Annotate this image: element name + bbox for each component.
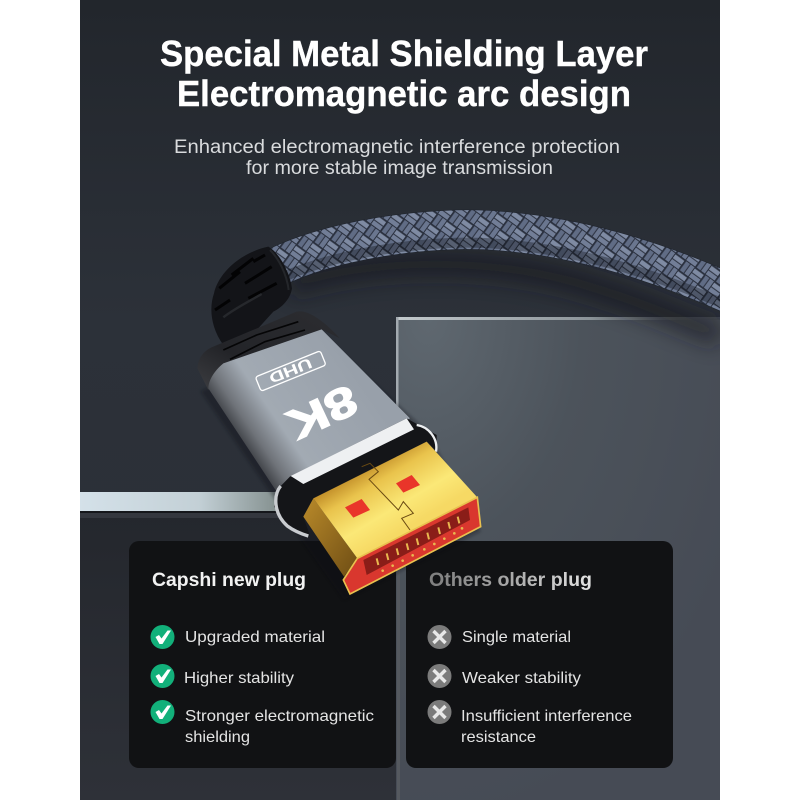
circuit traces <box>362 463 413 530</box>
title: Electromagnetic arc design <box>177 73 631 114</box>
heading: Capshi new plug: Capshi new plug <box>152 570 306 591</box>
item: insufficient resistance <box>428 700 632 746</box>
cable shadow <box>290 264 720 335</box>
8K mark: 8K <box>279 375 365 449</box>
UHD badge <box>255 349 326 391</box>
braided cable <box>275 230 735 309</box>
item: stronger shielding: shielding <box>185 729 250 746</box>
black throat <box>274 418 437 536</box>
black rear collar <box>197 311 340 390</box>
gold contact top <box>313 442 477 558</box>
item: upgraded material: Upgraded material <box>185 629 325 646</box>
right raised plate <box>396 317 720 800</box>
red pad left <box>345 499 370 518</box>
red pad right <box>396 475 420 493</box>
item: insufficient resistance: Insufficient interference <box>461 708 632 725</box>
item: stronger shielding <box>150 700 374 746</box>
red port face <box>343 497 481 594</box>
UHD badge: UHD <box>266 354 314 386</box>
item: weaker stability <box>428 664 581 688</box>
plug shadow <box>201 335 481 600</box>
DisplayPort plug illustration <box>197 247 481 600</box>
item: higher stability: Higher stability <box>184 670 294 687</box>
item: insufficient resistance: resistance <box>461 729 536 746</box>
item: stronger shielding: Stronger electromagnetic <box>185 708 374 725</box>
panel: Others older plug <box>406 541 673 768</box>
gold contact side <box>303 498 357 577</box>
item: single material: Single material <box>462 629 571 646</box>
item: weaker stability: Weaker stability <box>462 670 581 687</box>
item: single material <box>428 625 571 649</box>
item: upgraded material <box>150 625 325 649</box>
port slot and pins <box>363 507 470 575</box>
metal ring highlights <box>276 425 436 536</box>
title: Special Metal Shielding Layer <box>160 33 648 74</box>
item: higher stability <box>150 664 294 688</box>
bright shell rim <box>291 418 414 484</box>
lower left plate <box>80 492 302 574</box>
subtitle <box>174 137 620 179</box>
strain relief boot <box>211 247 292 345</box>
title <box>160 33 648 114</box>
subtitle: for more stable image transmission <box>246 158 553 179</box>
panel: Capshi new plug <box>129 541 396 768</box>
metal shell <box>208 329 410 491</box>
heading: Others older plug: Others older plug <box>429 570 592 591</box>
subtitle: Enhanced electromagnetic interference protection <box>174 137 620 158</box>
